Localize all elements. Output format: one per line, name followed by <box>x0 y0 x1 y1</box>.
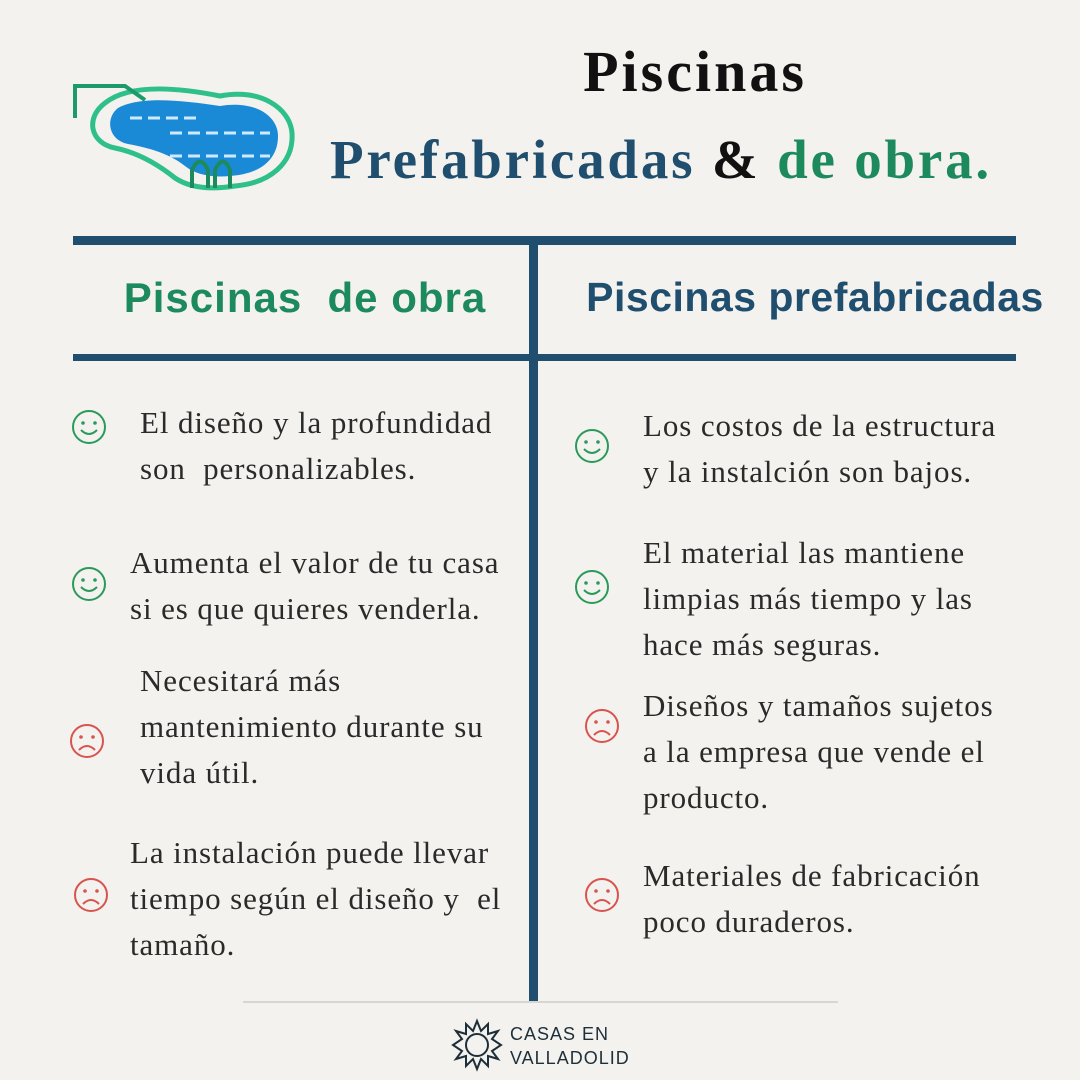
table lines <box>73 236 1016 245</box>
text: son personalizables. <box>140 451 416 486</box>
icon: pool <box>73 84 295 190</box>
logo text <box>510 1024 630 1068</box>
icon: smile <box>575 429 609 463</box>
icon: smile <box>575 570 609 604</box>
title: Piscinas <box>583 39 807 104</box>
left column items <box>70 405 501 962</box>
text: tamaño. <box>130 927 235 962</box>
text: Necesitará más <box>140 663 341 698</box>
text <box>643 688 994 815</box>
heading: de obra: Piscinas de obra <box>124 274 486 321</box>
text <box>130 545 499 626</box>
text: El material las mantiene <box>643 535 965 570</box>
icon: sun <box>451 1018 503 1072</box>
icon: sad <box>585 878 619 912</box>
text: Materiales de fabricación <box>643 858 980 893</box>
footer logo <box>451 1018 630 1072</box>
text: limpias más tiempo y las <box>643 581 973 616</box>
icon: smile <box>72 410 106 444</box>
text <box>643 858 980 939</box>
text: a la empresa que vende el <box>643 734 985 769</box>
logo text: CASAS EN <box>510 1024 609 1044</box>
text: vida útil. <box>140 755 259 790</box>
text: El diseño y la profundidad <box>140 405 492 440</box>
text: producto. <box>643 780 769 815</box>
text: Los costos de la estructura <box>643 408 996 443</box>
icon: smile <box>72 567 106 601</box>
text: Aumenta el valor de tu casa <box>130 545 499 580</box>
heading: prefabricadas: Piscinas prefabricadas <box>586 274 1044 320</box>
logo text: VALLADOLID <box>510 1048 630 1068</box>
text: tiempo según el diseño y el <box>130 881 501 916</box>
text: La instalación puede llevar <box>130 835 489 870</box>
icon: sad <box>585 709 619 743</box>
text <box>140 405 492 486</box>
text: hace más seguras. <box>643 627 881 662</box>
text: si es que quieres venderla. <box>130 591 481 626</box>
text <box>130 835 501 962</box>
text <box>140 663 484 790</box>
text: poco duraderos. <box>643 904 854 939</box>
text: Diseños y tamaños sujetos <box>643 688 994 723</box>
subtitle: Prefabricadas & de obra. <box>330 129 992 190</box>
text: mantenimiento durante su <box>140 709 484 744</box>
text <box>643 535 973 662</box>
text: y la instalción son bajos. <box>643 454 972 489</box>
icon: sad <box>74 878 108 912</box>
icon: sad <box>70 724 104 758</box>
text <box>643 408 996 489</box>
right column items <box>575 408 996 939</box>
